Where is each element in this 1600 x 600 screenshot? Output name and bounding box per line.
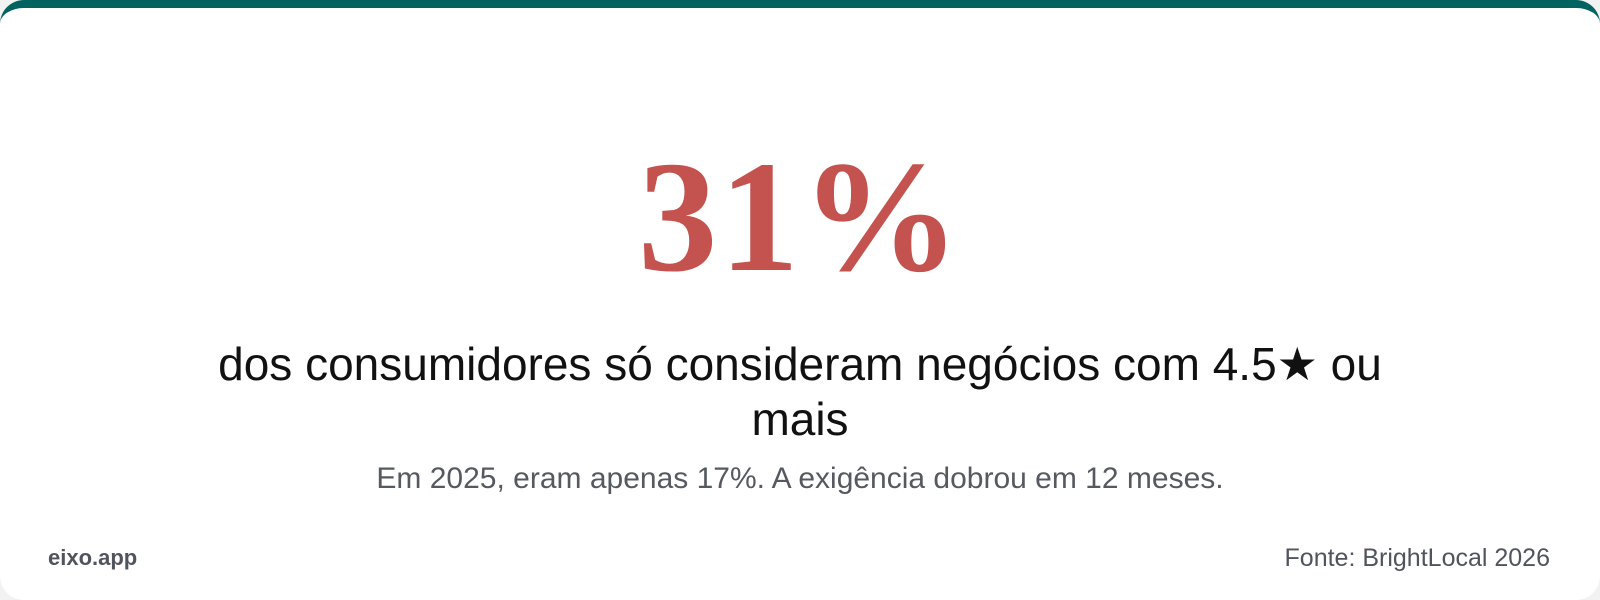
source footer: Fonte: BrightLocal 2026 — [1285, 544, 1550, 572]
headline text: dos consumidores só consideram negócios com 4.5★ ou mais — [218, 338, 1382, 445]
brand footer: eixo.app — [48, 545, 137, 570]
supporting note: Em 2025, eram apenas 17%. A exigência dobrou em 12 meses. — [376, 462, 1224, 495]
big stat: 31% — [638, 129, 962, 305]
